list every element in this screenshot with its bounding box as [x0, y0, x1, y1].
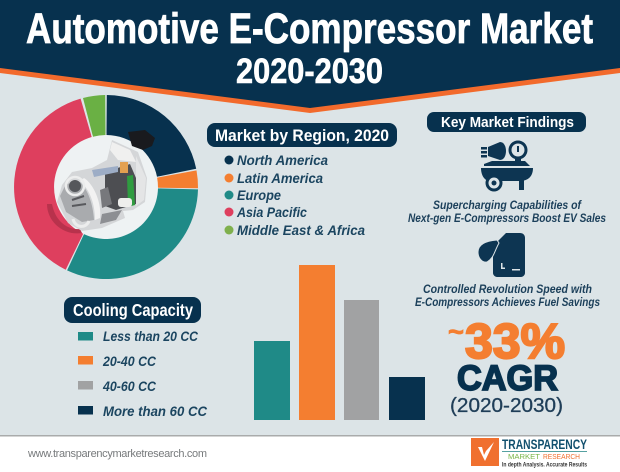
icon: fuel jerrycan — [478, 233, 525, 277]
logo: Transparency Market Research: In depth Analysis. Accurate Results — [502, 462, 587, 468]
subtitle years: 2020-2030 — [236, 52, 383, 91]
logo: Transparency Market Research — [471, 436, 587, 468]
legend: regions: Latin America — [237, 170, 323, 186]
text: finding two: Controlled Revolution Speed with — [423, 284, 592, 296]
segment: Latin America — [157, 170, 198, 188]
logo: Transparency Market Research: MARKET — [508, 452, 540, 461]
callout: CAGR: 33% — [465, 315, 565, 369]
legend: cooling capacity — [78, 328, 208, 419]
website url: www.transparencymarketresearch.com — [27, 448, 207, 460]
segment: Asia Pacific — [14, 99, 92, 270]
callout: CAGR: ~ — [448, 316, 464, 347]
callout: CAGR — [448, 315, 565, 417]
bar chart: cooling capacity — [254, 265, 425, 420]
compressor photo illustration — [47, 130, 155, 233]
segment: Middle East and Africa — [83, 95, 106, 137]
legend: cooling capacity: More than 60 CC — [103, 403, 208, 419]
donut chart: market by region — [14, 95, 198, 279]
heading: cooling capacity — [64, 297, 201, 323]
legend: regions: Europe — [237, 187, 281, 203]
text: finding one — [408, 200, 606, 225]
legend: regions: North America — [237, 152, 328, 168]
logo: Transparency Market Research: RESEARCH — [543, 452, 580, 461]
text: finding one: Supercharging Capabilities of — [433, 200, 582, 212]
heading: key market findings: Key Market Findings — [441, 114, 574, 131]
legend: cooling capacity: 20-40 CC — [102, 353, 157, 369]
legend: cooling capacity: Less than 20 CC — [103, 328, 199, 344]
legend: regions — [224, 152, 365, 238]
footer — [0, 435, 620, 472]
icon: air compressor — [481, 140, 533, 192]
callout: CAGR: CAGR — [457, 359, 558, 398]
legend: cooling capacity: 40-60 CC — [102, 378, 157, 394]
heading: market by region: Market by Region, 2020 — [215, 126, 389, 145]
logo: Transparency Market Research: TRANSPARENCY — [502, 436, 587, 452]
header banner — [0, 0, 620, 113]
segment: Europe — [67, 188, 198, 279]
segment: North America — [106, 95, 196, 177]
legend: regions: Asia Pacific — [236, 204, 307, 220]
text: finding two — [415, 284, 600, 309]
heading: cooling capacity: Cooling Capacity — [73, 300, 193, 320]
callout: CAGR: (2020-2030) — [450, 395, 563, 417]
legend: regions: Middle East & Africa — [237, 222, 365, 238]
